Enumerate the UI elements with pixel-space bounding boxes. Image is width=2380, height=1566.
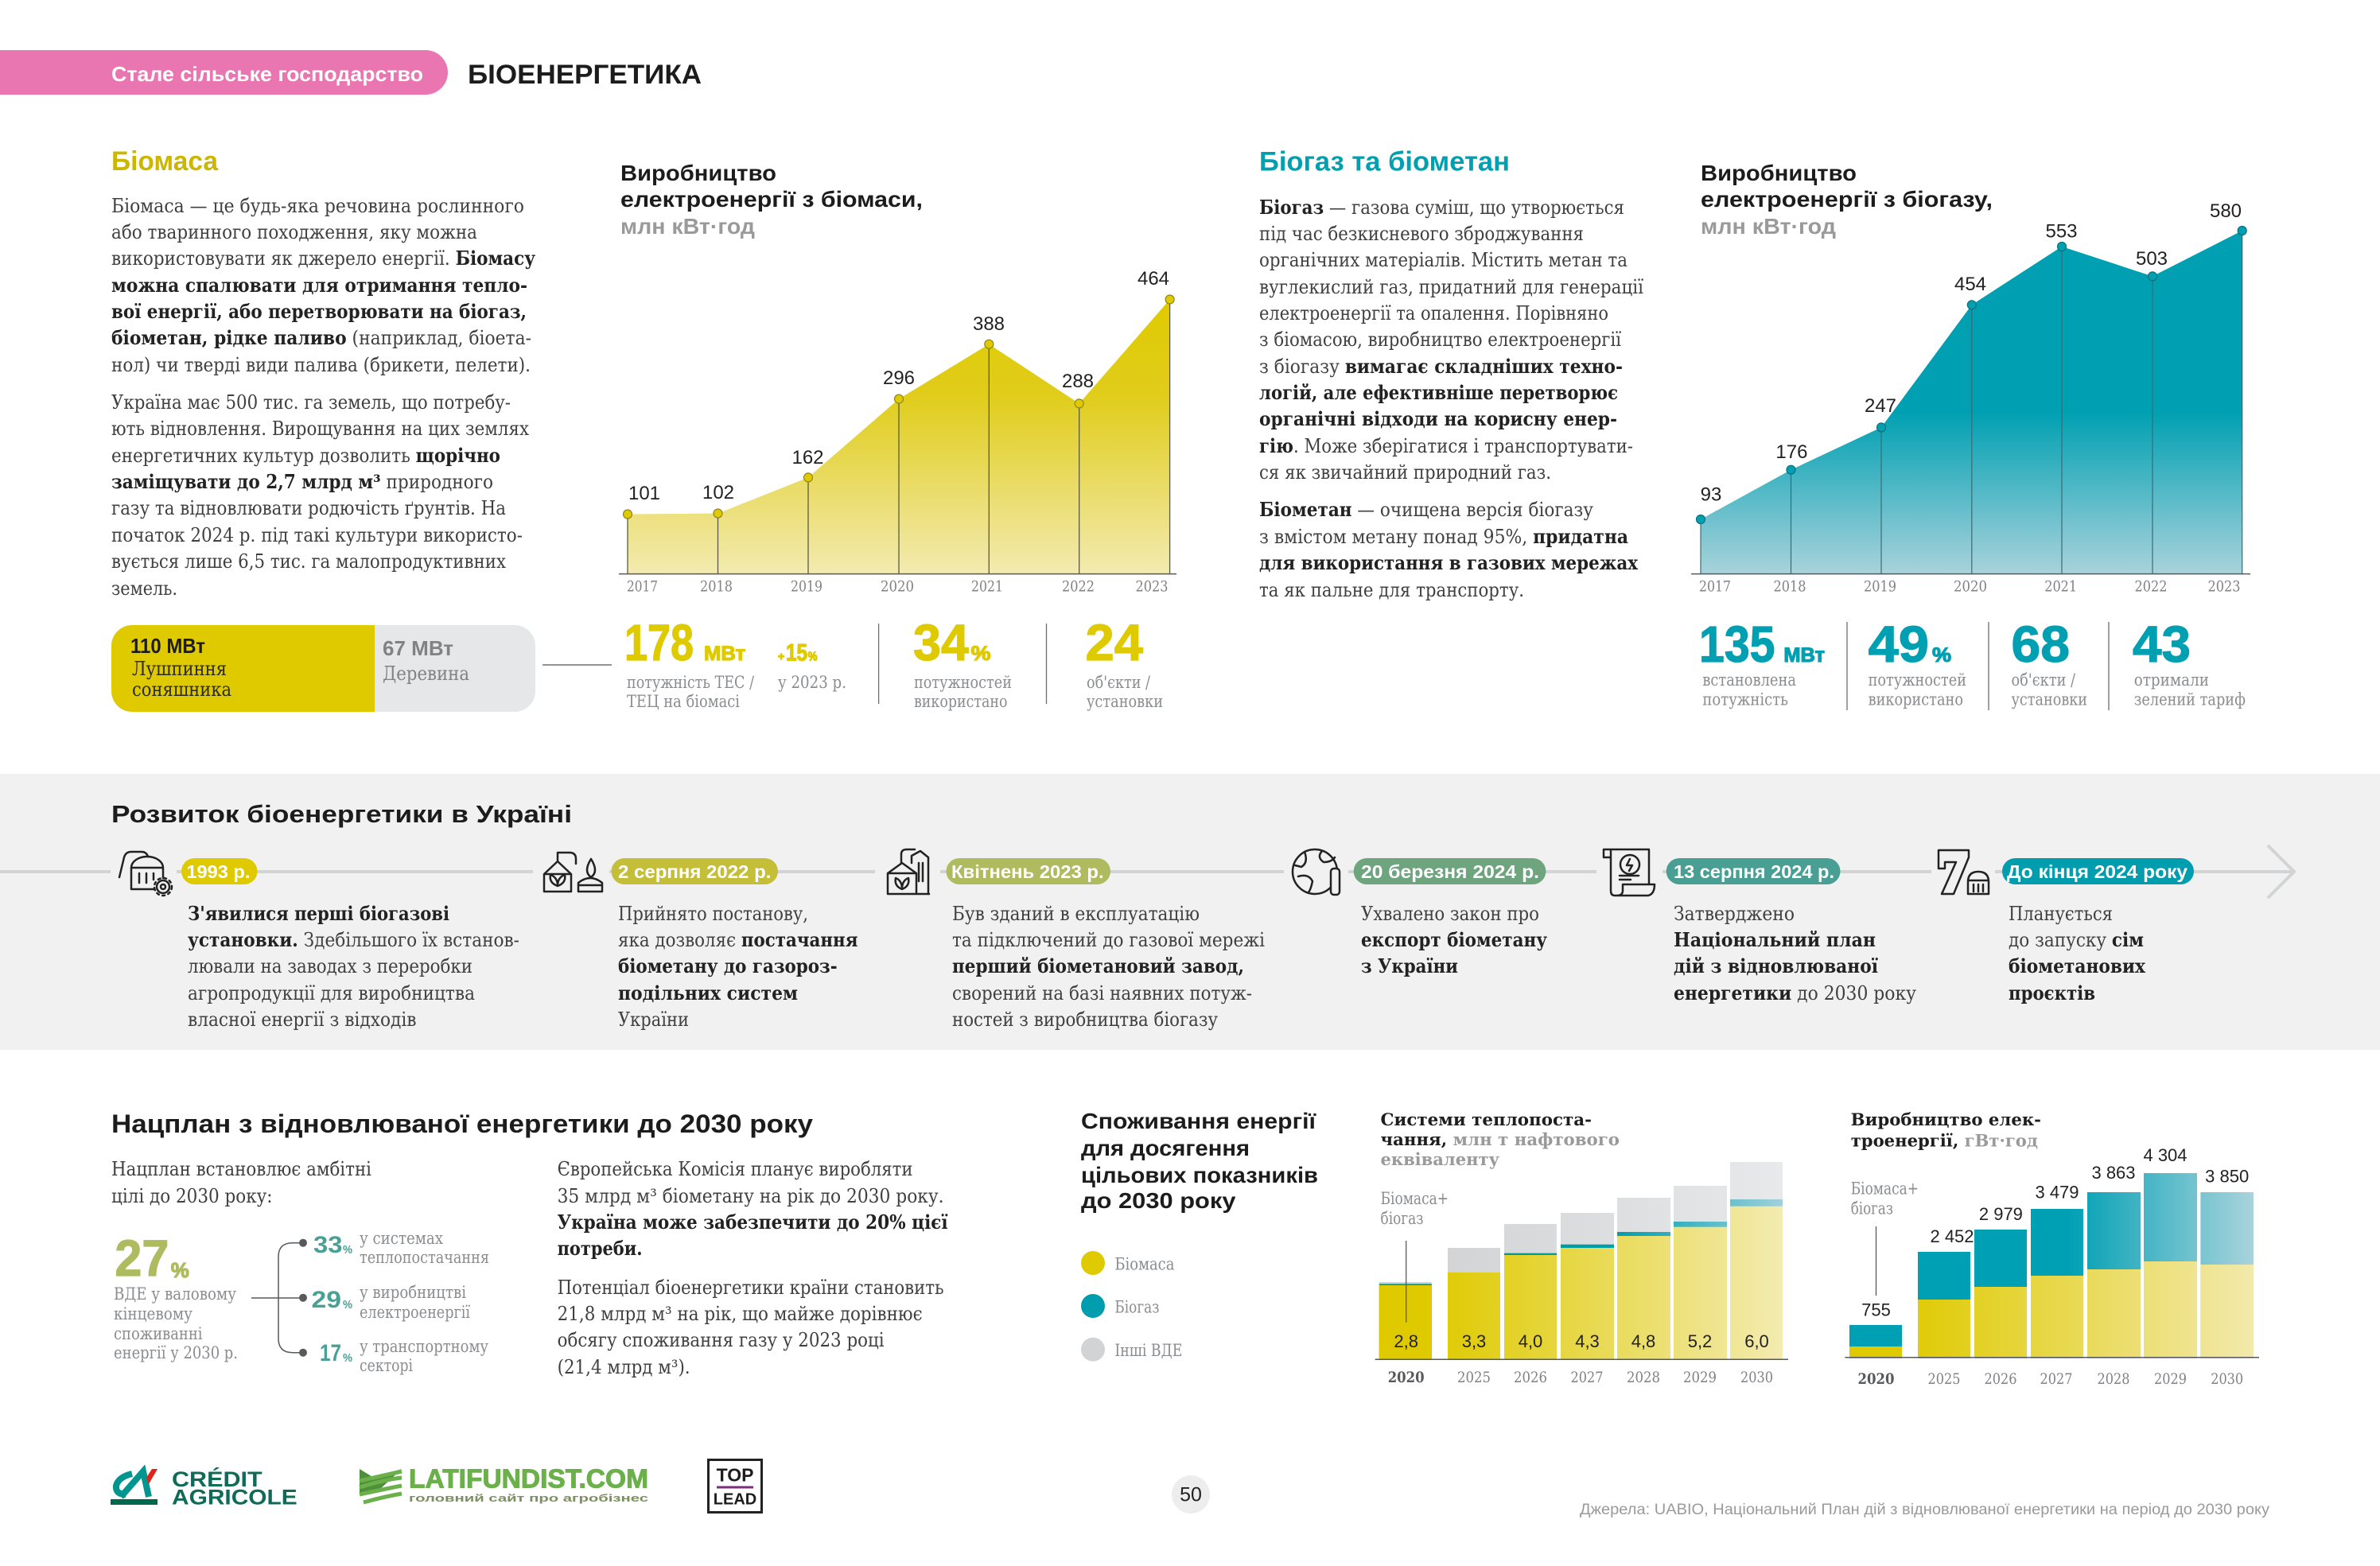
logo: Credit Agricole: CRÉDIT <box>172 1467 262 1491</box>
logo: Top Lead: TOP <box>717 1465 753 1486</box>
legend: Біомаса <box>1114 1255 1174 1274</box>
date pill <box>2002 858 2194 884</box>
KPI: biomass capacity <box>624 614 755 711</box>
area chart: 296 <box>883 367 915 389</box>
KPI: growth: + <box>778 650 784 663</box>
text block: яка дозволяє постачання <box>618 928 858 951</box>
annotation: biomass plus biogas: Біомаса+ <box>1851 1179 1919 1199</box>
text block: biogas definition: електроенергії та опалення. Порівняно <box>1259 302 1608 324</box>
KPI: capacity used <box>913 614 1012 711</box>
area chart: 247 <box>1865 395 1896 417</box>
text block: biogas definition: логій, але ефективніше перетворює <box>1259 381 1618 404</box>
text block: intro: цілі до 2030 року: <box>111 1185 272 1207</box>
KPI: 29 percent electricity: % <box>343 1298 352 1311</box>
text block: land potential <box>111 391 529 600</box>
KPI: installed capacity: потужність <box>1702 690 1788 709</box>
text block: до запуску сім <box>2009 928 2144 951</box>
value labels: 3 863 <box>2091 1163 2136 1183</box>
text block <box>2009 903 2146 1004</box>
KPI: biomass capacity: МВт <box>704 643 745 665</box>
text block: intro <box>111 1158 371 1207</box>
KPI: 17 percent transport: % <box>343 1351 352 1365</box>
timeline item end of 2024 <box>1939 850 2194 1004</box>
text block: Планується <box>2009 903 2113 925</box>
text block: України <box>618 1008 689 1031</box>
KPI: 33 percent heating: у системах <box>360 1229 443 1248</box>
chart title: Виробництво <box>620 161 776 185</box>
icon: globe with bottle <box>1293 849 1340 895</box>
chart title <box>1701 161 1993 239</box>
area chart: 2019 <box>1864 577 1896 595</box>
KPI: facilities: установки <box>1087 692 1163 711</box>
KPI: 27 percent: 27 <box>115 1230 169 1287</box>
area chart: 2018 <box>700 577 733 595</box>
section tag: pink pill: Стале сільське господарство <box>111 62 423 86</box>
area chart: 2021 <box>2044 577 2077 595</box>
chart title <box>1851 1109 2041 1151</box>
chart title <box>1381 1109 1620 1169</box>
text block: biomass definition: або тваринного походження, яку можна <box>111 221 477 243</box>
chart title: млн кВт·год <box>1701 214 1836 239</box>
KPI: 29 percent electricity: 29 <box>312 1287 341 1313</box>
text block: biomethane definition: Біометан — очищена версія біогазу <box>1259 498 1593 521</box>
text block: bioenergy potential <box>558 1277 944 1378</box>
connector to KPI <box>542 664 612 666</box>
text block: biomass definition: Біомаса — це будь-яка речовина рослинного <box>111 195 524 217</box>
KPI: installed capacity: встановлена <box>1702 670 1796 690</box>
text block: biomethane definition: та як пальне для транспорту. <box>1259 579 1524 601</box>
timeline item 2 August 2022 <box>544 853 858 1031</box>
text block: bioenergy potential: обсягу споживання газу у 2023 році <box>558 1329 885 1351</box>
text block: перший біометановий завод, <box>952 954 1244 977</box>
KPI: biomass capacity: ТЕЦ на біомасі <box>627 692 740 711</box>
text block: та підключений до газової мережі <box>952 929 1265 951</box>
heading: consumption: для досягення <box>1081 1136 1250 1160</box>
area chart <box>619 268 1176 595</box>
KPI: green tariff: отримали <box>2134 670 2209 690</box>
text block: land potential: ють відновлення. Вирощування на цих землях <box>111 418 529 440</box>
date pill <box>611 858 778 884</box>
year labels: 2029 <box>2154 1370 2187 1388</box>
KPI: 27 percent: енергії у 2030 р. <box>114 1343 238 1362</box>
KPI: 33 percent heating: 33 <box>313 1232 342 1258</box>
KPI: green tariff <box>2133 616 2246 709</box>
year labels: 2027 <box>2040 1370 2073 1388</box>
area chart: 580 <box>2210 200 2242 222</box>
text block: bioenergy potential: 21,8 млрд м³ на рік, що майже дорівнює <box>558 1303 923 1325</box>
page title: БІОЕНЕРГЕТИКА <box>468 60 702 90</box>
area chart: 464 <box>1138 268 1169 289</box>
KPI: capacity used: % <box>1932 644 1951 666</box>
KPI: 27 percent <box>114 1230 238 1362</box>
source note: Джерела: UABIO, Національний План дій з відновлюваної енергетики на період до 2030 року <box>1580 1502 2270 1518</box>
KPI: 17 percent transport: 17 <box>320 1340 341 1366</box>
text block: land potential: заміщувати до 2,7 млрд м³ природного <box>111 470 493 493</box>
KPI: green tariff: 43 <box>2133 616 2191 673</box>
date pill: 13 серпня 2024 р. <box>1674 861 1834 882</box>
year labels: 2028 <box>1627 1369 1660 1386</box>
text block: European Commission <box>558 1158 948 1260</box>
timeline item April 2023 <box>888 849 1265 1031</box>
stacked bar: capacity by fuel: Лушпиння <box>132 658 227 680</box>
timeline item 13 August 2024 <box>1604 849 1916 1004</box>
KPI: 27 percent: споживанні <box>114 1324 203 1343</box>
KPI: installed capacity: 135 <box>1699 616 1775 673</box>
logo: Latifundist: головний сайт про агробізнес <box>409 1492 648 1504</box>
footer <box>111 1460 2270 1518</box>
text block <box>618 903 858 1031</box>
value labels: 6,0 <box>1744 1331 1769 1351</box>
area chart: 162 <box>791 447 824 468</box>
KPI: 27 percent: % <box>171 1258 189 1282</box>
text block: biogas definition: гію. Може зберігатися і транспортувати- <box>1259 434 1633 457</box>
text block: біометанових <box>2009 954 2146 977</box>
KPI: capacity used: використано <box>914 692 1007 711</box>
year labels: 2029 <box>1683 1369 1717 1386</box>
text block: biomethane definition: з вмістом метану понад 95%, придатна <box>1259 525 1628 548</box>
year labels <box>1388 1369 1773 1386</box>
annotation: biomass plus biogas <box>1851 1179 1919 1296</box>
year labels: 2030 <box>1740 1369 1773 1386</box>
area chart: 454 <box>1954 274 1986 295</box>
text block: European Commission: 35 млрд м³ біометану на рік до 2030 року. <box>558 1185 944 1207</box>
value labels: 3 479 <box>2035 1183 2079 1203</box>
chart title: електроенергії з біогазу, <box>1701 187 1993 212</box>
area chart: 2023 <box>2208 577 2240 595</box>
stacked bar: capacity by fuel: 110 МВт <box>130 634 205 658</box>
text block <box>1674 903 1916 1004</box>
panel: energy consumption legend <box>1081 1109 1318 1362</box>
area chart: 2022 <box>1062 577 1095 595</box>
area chart: 2021 <box>971 577 1003 595</box>
page number <box>1172 1475 1210 1514</box>
value labels <box>1394 1331 1769 1351</box>
panel: electricity production bar chart <box>1845 1109 2259 1388</box>
chart title <box>620 161 923 239</box>
chart title: млн кВт·год <box>620 214 755 239</box>
KPI: growth <box>778 639 846 692</box>
text block: biomass definition: біометан, рідке паливо (наприклад, біоета- <box>111 326 531 349</box>
text block: власної енергії з відходів <box>188 1008 417 1031</box>
text block: biogas definition: органічних матеріалів. Містить метан та <box>1259 249 1628 271</box>
year labels: 2025 <box>1928 1370 1960 1388</box>
value labels: 4 304 <box>2143 1145 2188 1165</box>
annotation: biomass plus biogas: біогаз <box>1851 1199 1893 1218</box>
value labels: 755 <box>1861 1300 1891 1320</box>
text block: biomethane definition <box>1259 498 1639 601</box>
icon: scroll with clock <box>1604 849 1655 896</box>
heading: national plan: Нацплан з відновлюваної енергетики до 2030 року <box>111 1109 813 1138</box>
chart title: Виробництво елек- <box>1851 1109 2041 1129</box>
KPI: biomass capacity: потужність ТЕС / <box>627 673 755 692</box>
bars <box>1845 1173 2259 1358</box>
panel: biogas text <box>1259 147 1643 601</box>
KPI: capacity used: 34 <box>913 614 969 671</box>
text block: biogas definition: під час безкисневого зброджування <box>1259 223 1584 245</box>
annotation: biomass plus biogas: Біомаса+ <box>1381 1189 1449 1208</box>
panel: heating systems bar chart <box>1375 1109 1788 1386</box>
date pill: Квітнень 2023 р. <box>951 861 1104 882</box>
bracket connector <box>251 1239 307 1357</box>
text block: З'явилися перші біогазові <box>188 902 449 925</box>
heading: consumption: до 2030 року <box>1081 1188 1236 1213</box>
bars <box>1375 1162 1788 1359</box>
area chart: 2019 <box>791 577 822 595</box>
text block: biomass definition: можна спалювати для отримання тепло- <box>111 274 527 297</box>
year labels: 2020 <box>1858 1370 1895 1388</box>
KPI: capacity used <box>1869 616 1966 709</box>
text block: land potential: Україна має 500 тис. га земель, що потребу- <box>111 391 511 414</box>
text block: land potential: енергетичних культур дозволить щорічно <box>111 444 500 467</box>
annotation: biomass plus biogas: біогаз <box>1381 1209 1424 1228</box>
KPI: capacity used: використано <box>1869 690 1963 709</box>
value labels: 2,8 <box>1394 1331 1418 1351</box>
chart title: еквіваленту <box>1381 1149 1500 1169</box>
logo: Latifundist <box>360 1464 648 1504</box>
text block: bioenergy potential: Потенціал біоенергетики країни становить <box>558 1277 944 1299</box>
KPI: capacity used: % <box>970 643 991 665</box>
header band <box>0 50 702 95</box>
area chart: 102 <box>702 482 734 503</box>
text block: сворений на базі наявних потуж- <box>952 982 1252 1004</box>
year labels: 2026 <box>1514 1369 1547 1386</box>
legend <box>1081 1251 1182 1362</box>
KPI: installed capacity <box>1699 616 1825 709</box>
chart title: Системи теплопоста- <box>1381 1109 1592 1129</box>
icon: biogas tank with gear <box>119 852 172 896</box>
icon: outlined seven with tank <box>1939 850 1989 894</box>
area chart: 176 <box>1775 441 1807 463</box>
text block <box>1361 903 1548 977</box>
logo: Credit Agricole <box>111 1467 298 1510</box>
date pill: До кінця 2024 року <box>2007 861 2188 882</box>
text block: European Commission: потреби. <box>558 1237 643 1260</box>
area chart: 2017 <box>1699 577 1731 595</box>
heading: biomass: Біомаса <box>111 146 219 177</box>
logo: Top Lead: LEAD <box>714 1491 756 1509</box>
text block: biogas definition <box>1259 196 1643 484</box>
chart title: чання, млн т нафтового <box>1381 1129 1620 1149</box>
area chart: 2020 <box>1954 577 1987 595</box>
panel: biomass electricity chart <box>619 161 1176 711</box>
value labels: 2 979 <box>1979 1204 2023 1224</box>
text block: biomethane definition: для використання в газових мережах <box>1259 551 1639 574</box>
text block: European Commission: Україна може забезпечити до 20% цієї <box>558 1210 948 1234</box>
stacked bar: capacity by fuel: 67 МВт <box>383 636 453 660</box>
text block: біометану до газороз- <box>618 954 838 977</box>
value labels: 4,3 <box>1575 1331 1600 1351</box>
chart title: Виробництво <box>1701 161 1857 185</box>
text block: з України <box>1361 954 1458 977</box>
annotation: biomass plus biogas <box>1381 1189 1449 1323</box>
text block: biomass definition: нол) чи тверді види палива (брикети, пелети). <box>111 354 531 376</box>
icon: tank with leaf and flame <box>544 853 602 892</box>
KPI: facilities: 68 <box>2011 616 2070 673</box>
area chart: 2022 <box>2135 577 2167 595</box>
text block: подільних систем <box>618 981 798 1004</box>
year labels: 2027 <box>1570 1369 1604 1386</box>
text block: ностей з виробництва біогазу <box>952 1008 1218 1031</box>
icon: tank and silo <box>888 849 929 894</box>
panel: biogas electricity chart <box>1691 161 2250 710</box>
date pill: 1993 р. <box>186 861 250 882</box>
text block: установки. Здебільшого їх встанов- <box>188 928 519 951</box>
KPI: facilities: об'єкти / <box>2011 670 2076 690</box>
heading: consumption: Споживання енергії <box>1081 1109 1316 1133</box>
panel: biomass text <box>111 146 612 712</box>
legend: Біогаз <box>1114 1298 1159 1317</box>
logo: Latifundist: LATIFUNDIST.COM <box>409 1464 648 1494</box>
KPI: 27 percent: ВДЕ у валовому <box>114 1284 237 1304</box>
text block: Був зданий в експлуатацію <box>952 903 1200 925</box>
year labels: 2030 <box>2211 1370 2243 1388</box>
logo: Top Lead <box>708 1460 762 1513</box>
KPI: 17 percent transport <box>320 1337 489 1375</box>
KPI: green tariff: зелений тариф <box>2134 690 2246 709</box>
value labels: 4,0 <box>1519 1331 1542 1351</box>
KPI: growth: у 2023 р. <box>778 673 846 692</box>
heading: biogas and biomethane: Біогаз та біометан <box>1259 147 1510 177</box>
year labels: 2026 <box>1984 1370 2017 1388</box>
area chart: 2020 <box>881 577 914 595</box>
KPI: 33 percent heating <box>313 1229 489 1267</box>
text block: biogas definition: органічні відходи на корисну енер- <box>1259 407 1617 430</box>
text block: biogas definition: ся як звичайний природний газ. <box>1259 461 1551 484</box>
text block: проєктів <box>2009 981 2095 1004</box>
area chart: 388 <box>973 313 1005 335</box>
KPI: 29 percent electricity: електроенергії <box>360 1303 470 1322</box>
text block: biomass definition: використовувати як джерело енергії. Біомасу <box>111 247 536 270</box>
text block: intro: Нацплан встановлює амбітні <box>111 1158 371 1180</box>
text block: land potential: вується лише 6,5 тис. га малопродуктивних <box>111 550 506 573</box>
heading: consumption: цільових показників <box>1081 1163 1318 1187</box>
year labels: 2020 <box>1388 1369 1425 1386</box>
area chart: 93 <box>1701 484 1721 506</box>
area chart: 2018 <box>1774 577 1806 595</box>
text block: land potential: земель. <box>111 577 177 600</box>
value labels: 2 452 <box>1930 1226 1974 1246</box>
KPI: capacity used: потужностей <box>1869 670 1966 690</box>
KPI: 33 percent heating: теплопостачання <box>360 1248 489 1267</box>
value labels: 4,8 <box>1631 1331 1655 1351</box>
KPI: facilities <box>2011 616 2087 709</box>
section tag: pink pill <box>0 50 448 95</box>
text block: Прийнято постанову, <box>618 903 808 925</box>
date pill: 20 березня 2024 р. <box>1361 861 1539 882</box>
area chart <box>1691 200 2250 595</box>
area chart: 503 <box>2136 248 2168 270</box>
date pill <box>181 858 258 884</box>
text block: Ухвалено закон про <box>1361 903 1539 925</box>
text block: biogas definition: вуглекислий газ, придатний для генерації <box>1259 276 1643 298</box>
text block: лювали на заводах з переробки <box>188 955 472 977</box>
value labels <box>1861 1145 2249 1320</box>
KPI: 29 percent electricity <box>312 1283 470 1322</box>
text block <box>188 902 519 1031</box>
text block: Національний план <box>1674 928 1876 951</box>
value labels: 3,3 <box>1462 1331 1486 1351</box>
panel: timeline band <box>0 774 2380 1050</box>
area chart: 2017 <box>627 577 658 595</box>
KPI: 17 percent transport: у транспортному <box>360 1337 489 1356</box>
text block: енергетики до 2030 року <box>1674 981 1916 1004</box>
timeline item 20 March 2024 <box>1293 849 1548 977</box>
value labels: 5,2 <box>1688 1331 1712 1351</box>
year labels: 2028 <box>2097 1370 2130 1388</box>
text block <box>952 903 1265 1031</box>
text block: biogas definition: з біомасою, виробництво електроенергії <box>1259 328 1621 351</box>
KPI: facilities: об'єкти / <box>1087 673 1151 692</box>
KPI: 29 percent electricity: у виробництві <box>360 1283 466 1302</box>
KPI: growth: % <box>808 651 818 663</box>
KPI: facilities: установки <box>2011 690 2087 709</box>
text block: Затверджено <box>1674 903 1795 925</box>
text block: land potential: газу та відновлювати родючість ґрунтів. На <box>111 497 506 519</box>
panel: national plan <box>111 1109 948 1378</box>
arrow: timeline end <box>2268 845 2294 898</box>
text block: дій з відновлюваної <box>1674 954 1878 977</box>
KPI: facilities: 24 <box>1085 614 1143 671</box>
text block: biomass definition <box>111 195 536 376</box>
text block: biogas definition: Біогаз — газова суміш, що утворюється <box>1259 196 1624 219</box>
stacked bar: capacity by fuel: Деревина <box>383 663 469 685</box>
KPI: installed capacity: МВт <box>1783 644 1825 666</box>
KPI: 33 percent heating: % <box>343 1243 352 1257</box>
KPI: capacity used: 49 <box>1869 616 1929 673</box>
area chart: 288 <box>1062 371 1094 392</box>
date pill <box>1354 858 1546 884</box>
text block: biogas definition: з біогазу вимагає складніших техно- <box>1259 355 1623 378</box>
stacked bar: capacity by fuel: соняшника <box>132 678 231 701</box>
stacked bar: capacity by fuel <box>111 625 535 712</box>
text block: European Commission: Європейська Комісія планує виробляти <box>558 1158 913 1180</box>
text block: land potential: початок 2024 р. під такі культури використо- <box>111 524 523 546</box>
area chart: 101 <box>628 483 660 504</box>
value labels: 3 850 <box>2205 1167 2249 1187</box>
year labels: 2025 <box>1457 1369 1491 1386</box>
KPI: 17 percent transport: секторі <box>360 1356 413 1375</box>
heading: timeline: Розвиток біоенергетики в Україні <box>111 800 572 828</box>
KPI: growth: 15 <box>786 639 807 666</box>
KPI: capacity used: потужностей <box>914 673 1012 692</box>
logo: Credit Agricole: AGRICOLE <box>172 1486 298 1510</box>
heading: consumption <box>1081 1109 1318 1213</box>
date pill: 2 серпня 2022 р. <box>618 861 771 882</box>
area chart: 2023 <box>1136 577 1168 595</box>
legend: Інші ВДЕ <box>1114 1341 1182 1360</box>
text block: експорт біометану <box>1361 928 1548 951</box>
chart title: троенергії, гВт·год <box>1851 1131 2038 1151</box>
area chart: 553 <box>2045 221 2078 242</box>
chart title: електроенергії з біомаси, <box>620 187 923 212</box>
text block: biomass definition: вої енергії, або перетворювати на біогаз, <box>111 300 527 323</box>
KPI: biomass capacity: 178 <box>624 614 694 671</box>
timeline item 1993 <box>119 852 519 1031</box>
KPI: 27 percent: кінцевому <box>114 1304 193 1323</box>
text block: агропродукції для виробництва <box>188 982 475 1004</box>
KPI: facilities <box>1085 614 1163 711</box>
year labels <box>1858 1370 2243 1388</box>
text block: bioenergy potential: (21,4 млрд м³). <box>558 1356 690 1378</box>
page number: 50 <box>1180 1484 1202 1506</box>
